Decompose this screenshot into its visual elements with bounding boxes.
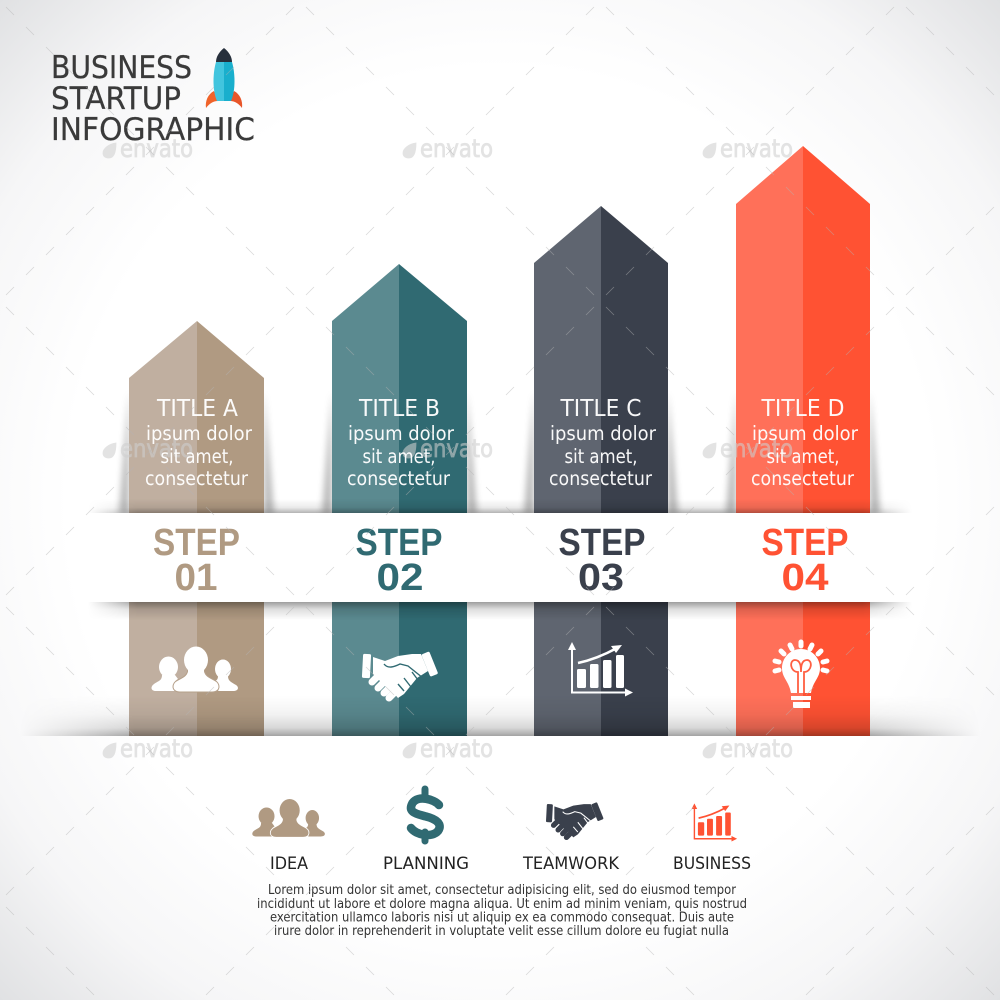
step 01: STEP: [153, 522, 240, 564]
step band: [82, 513, 918, 602]
arrow text: title C: sit amet,: [564, 445, 638, 468]
body text: irure dolor in reprehenderit in voluptate velit esse cillum dolore eu fugiat nulla: [274, 923, 729, 939]
label: planning: PLANNING: [383, 854, 469, 873]
watermarks: envato: [120, 134, 193, 163]
arrow text: title A: [145, 394, 253, 490]
label: business: BUSINESS: [673, 854, 751, 873]
body text: [257, 882, 747, 939]
step 02: [356, 522, 442, 599]
icon: chart (business): [692, 803, 737, 842]
watermarks: [103, 134, 793, 763]
watermarks: envato: [420, 134, 493, 163]
step 04: [762, 522, 848, 599]
arrow text: title B: ipsum dolor: [348, 422, 455, 445]
icon: rocket: [206, 48, 242, 108]
watermarks: envato: [720, 434, 793, 463]
arrow text: title C: consectetur: [549, 467, 653, 490]
step 03: STEP: [558, 522, 646, 564]
watermarks: envato: [120, 434, 193, 463]
step 03: 03: [578, 557, 624, 599]
watermarks: envato: [420, 434, 493, 463]
icon: chart on arrow C: [568, 642, 633, 696]
arrow text: title B: [347, 394, 455, 490]
arrow text: title C: [549, 394, 657, 490]
arrow text: title A: consectetur: [145, 467, 249, 490]
step 01: 01: [174, 557, 218, 599]
icon: people (idea): [252, 799, 325, 837]
arrow text: title A: TITLE A: [156, 394, 238, 422]
arrow text: title A: sit amet,: [160, 445, 234, 468]
arrow text: title D: sit amet,: [766, 445, 840, 468]
body text: Lorem ipsum dolor sit amet, consectetur adipisicing elit, sed do eiusmod tempor: [268, 882, 736, 898]
arrow text: title D: TITLE D: [761, 394, 844, 422]
step 04: 04: [782, 557, 828, 599]
arrow C: [534, 206, 668, 736]
icon: light bulb on arrow D: [775, 642, 827, 708]
title: [51, 50, 255, 148]
watermarks: envato: [720, 734, 793, 763]
floor shadow: [31, 708, 969, 736]
body text: exercitation ullamco laboris nisi ut aliquip ex ea commodo consequat. Duis aute: [270, 910, 734, 926]
arrow text: title A: ipsum dolor: [146, 422, 253, 445]
icon: handshake (teamwork): [546, 802, 604, 837]
icon: people on arrow A: [152, 646, 238, 692]
step 03: [558, 522, 646, 599]
step 02: 02: [376, 557, 424, 599]
arrow text: title D: [751, 394, 859, 490]
step 04: STEP: [762, 522, 848, 564]
arrow text: title D: ipsum dolor: [752, 422, 859, 445]
icon: handshake on arrow B: [362, 651, 438, 698]
step 01: [153, 522, 240, 599]
arrow text: title B: TITLE B: [358, 394, 440, 422]
arrow text: title C: ipsum dolor: [550, 422, 657, 445]
arrow D: [736, 146, 870, 736]
label: teamwork: TEAMWORK: [522, 854, 620, 873]
band shadows: [88, 499, 912, 620]
icon: dollar (planning): [411, 789, 440, 841]
title: BUSINESS: [51, 50, 192, 86]
arrow A: [129, 321, 264, 736]
watermarks: envato: [120, 734, 193, 763]
arrow shadows: [119, 390, 880, 513]
title: INFOGRAPHIC: [51, 112, 255, 148]
body text: incididunt ut labore et dolore magna aliqua. Ut enim ad minim veniam, quis nostrud: [257, 896, 747, 912]
watermarks: envato: [420, 734, 493, 763]
step 02: STEP: [356, 522, 442, 564]
arrow text: title B: consectetur: [347, 467, 451, 490]
watermarks: envato: [720, 134, 793, 163]
arrow text: title C: TITLE C: [560, 394, 642, 422]
arrow text: title D: consectetur: [751, 467, 855, 490]
arrow text: title B: sit amet,: [362, 445, 436, 468]
arrow B: [332, 264, 467, 736]
title: STARTUP: [51, 81, 181, 117]
label: idea: IDEA: [270, 854, 309, 873]
